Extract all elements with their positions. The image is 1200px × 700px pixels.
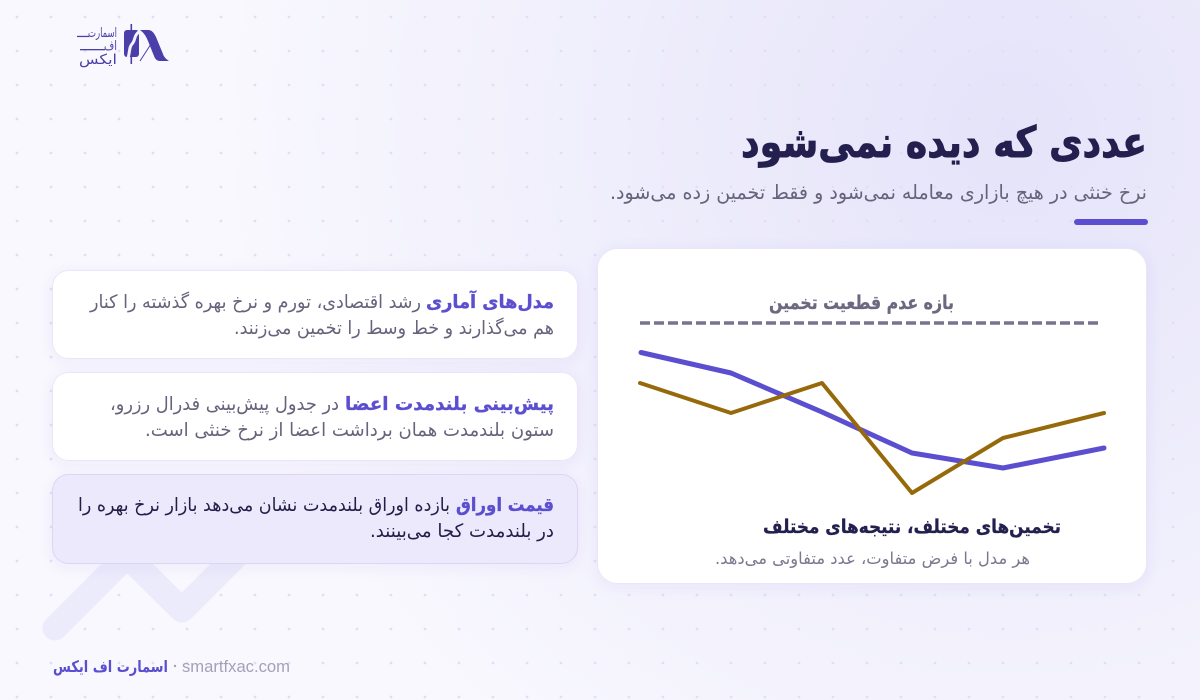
footer brand: اسمارت اف ایکس: [53, 657, 168, 676]
chart caption heading: تخمین‌های مختلف، نتیجه‌های مختلف: [763, 516, 1061, 538]
card text: ستون بلندمدت همان برداشت اعضا از نرخ خنثی است.: [145, 420, 554, 441]
dashed uncertainty line: [640, 321, 1102, 325]
card text: در بلندمدت کجا می‌بینند.: [370, 521, 554, 542]
panel: chart: [598, 248, 1146, 584]
logo wordmark: اف: [104, 39, 117, 54]
logo: [77, 24, 169, 68]
card text: [89, 291, 554, 339]
chart caption text: هر مدل با فرض متفاوت، عدد متفاوتی می‌دهد.: [715, 549, 1030, 569]
card text: در جدول پیش‌بینی فدرال رزرو،: [110, 394, 339, 415]
card heading: پیش‌بینی بلندمدت اعضا: [345, 394, 554, 415]
card text: [110, 394, 554, 441]
logo wordmark: ایکس: [79, 52, 117, 68]
card text: بازده اوراق بلندمدت نشان می‌دهد بازار نرخ بهره را: [78, 495, 450, 516]
footer separator: [174, 665, 176, 667]
card heading: مدل‌های آماری: [426, 290, 554, 313]
card: bond prices: [52, 474, 578, 564]
logo icon: [124, 24, 169, 64]
card: statistical models: [52, 270, 578, 358]
line: brown estimate: [640, 383, 1104, 493]
accent bar: [1074, 219, 1148, 225]
card text: هم می‌گذارند و خط وسط را تخمین می‌زنند.: [234, 317, 554, 339]
footer: [53, 657, 290, 676]
chart label: uncertainty range: بازه عدم قطعیت تخمین: [769, 292, 954, 314]
logo wordmark: [77, 26, 117, 68]
card: members' long-run forecast: [52, 372, 578, 460]
card text: رشد اقتصادی، تورم و نرخ بهره گذشته را کنار: [89, 291, 421, 313]
subtitle: نرخ خنثی در هیچ بازاری معامله نمی‌شود و فقط تخمین زده می‌شود.: [610, 181, 1147, 204]
card text: [78, 495, 554, 542]
card heading: قیمت اوراق: [456, 495, 554, 516]
line: blue estimate: [641, 352, 1104, 468]
footer url: smartfxac.com: [182, 658, 290, 676]
logo wordmark: اسمارت: [88, 26, 117, 41]
